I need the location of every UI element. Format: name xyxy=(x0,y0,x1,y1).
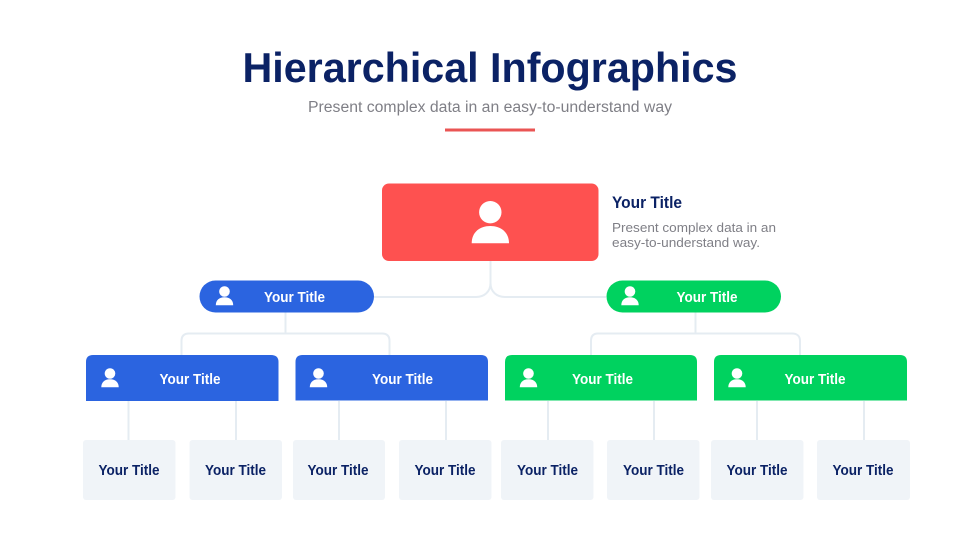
level 3 node: blue 1: Your Title xyxy=(160,371,220,388)
title underline xyxy=(445,128,535,132)
leaf 7 xyxy=(711,440,804,500)
leaf 8: Your Title xyxy=(832,462,894,479)
leaf 2 xyxy=(190,440,282,500)
root text: Present complex data in an xyxy=(612,220,776,235)
root node: red box xyxy=(382,184,598,261)
level 3 node: blue 2 xyxy=(296,355,488,400)
leaf 1 xyxy=(83,440,176,500)
level 3 node: blue 1 xyxy=(86,355,278,401)
leaf 4 xyxy=(399,440,492,500)
level 3 node: blue 2: Your Title xyxy=(372,371,433,388)
root title: Your Title xyxy=(612,193,682,212)
leaf 7: Your Title xyxy=(726,462,788,479)
leaf 8 xyxy=(817,440,910,500)
level 2 node: blue pill xyxy=(200,280,374,312)
title: Hierarchical Infographics xyxy=(242,44,738,91)
level 2 node: green pill xyxy=(606,280,781,312)
leaf 6: Your Title xyxy=(623,462,684,479)
leaf 2: Your Title xyxy=(205,462,266,479)
leaf 3 xyxy=(293,440,385,500)
root text: easy-to-understand way. xyxy=(612,235,760,250)
level 3 node: green 1: Your Title xyxy=(572,371,633,388)
subtitle: Present complex data in an easy-to-understand way xyxy=(308,99,672,116)
leaf 1: Your Title xyxy=(98,462,160,479)
level 3 node: green 2 xyxy=(714,355,907,400)
level 3 node: green 2: Your Title xyxy=(784,371,846,388)
leaf 5 xyxy=(501,440,594,500)
leaf 4: Your Title xyxy=(414,462,476,479)
leaf 6 xyxy=(607,440,700,500)
level 3 node: green 1 xyxy=(505,355,697,400)
level 2 node: green pill: Your Title xyxy=(676,289,738,306)
icon: person xyxy=(472,201,509,243)
root description xyxy=(612,193,776,250)
leaf 3: Your Title xyxy=(308,462,368,479)
connectors xyxy=(128,261,864,440)
level 2 node: blue pill: Your Title xyxy=(264,289,325,306)
leaf 5: Your Title xyxy=(517,462,578,479)
